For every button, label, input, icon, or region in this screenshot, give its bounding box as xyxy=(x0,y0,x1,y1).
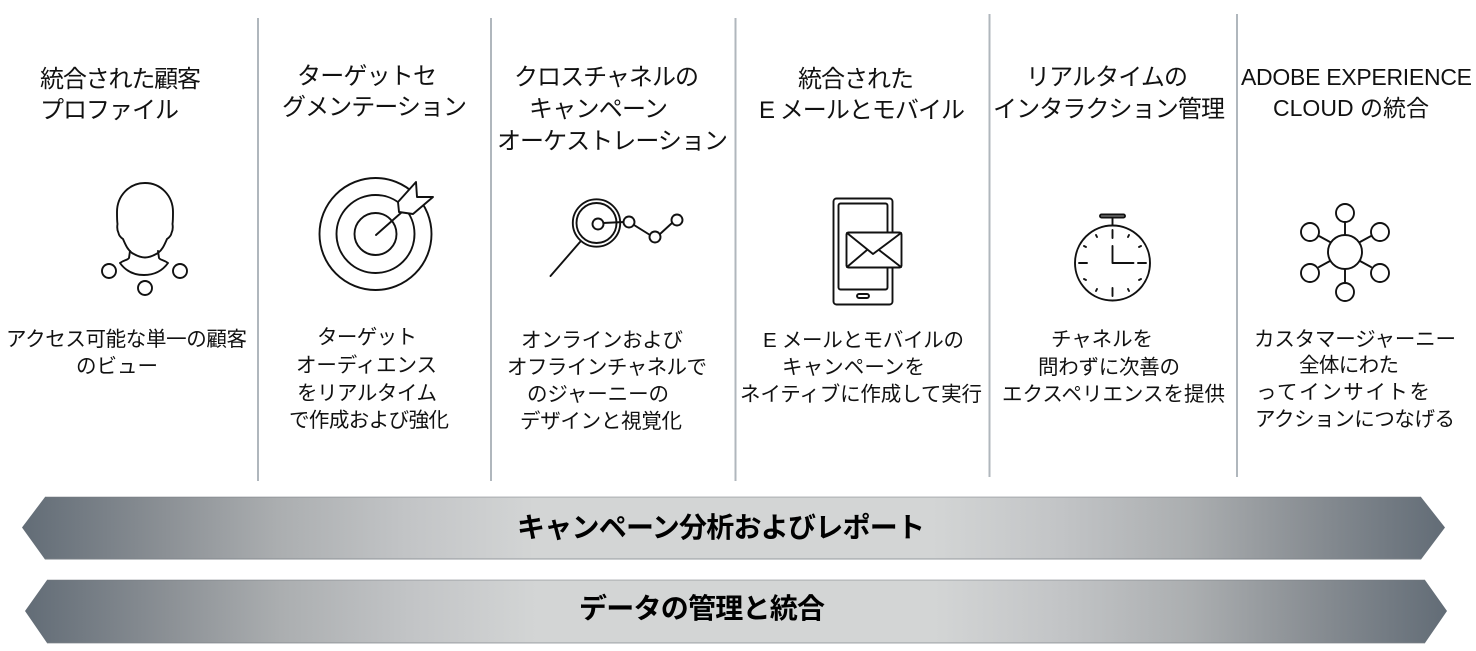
heading: real-time interaction management: リアルタイムの xyxy=(1026,64,1188,91)
heading: cross-channel campaign orchestration: オーケストレーション xyxy=(497,128,728,155)
panel: unified customer profile xyxy=(6,66,247,378)
heading: Adobe Experience Cloud integration xyxy=(1241,64,1472,121)
icon: phone with envelope xyxy=(834,198,902,304)
icon: hub network xyxy=(1301,204,1389,301)
banner: data management and integration xyxy=(25,580,1447,643)
heading: cross-channel campaign orchestration: クロスチャネルの xyxy=(514,64,699,91)
text: orchestration description: オンラインおよび xyxy=(521,329,683,352)
text: real-time description xyxy=(1002,328,1225,406)
heading: unified customer profile: 統合された顧客 xyxy=(40,66,201,93)
text: real-time description: 問わずに次善の xyxy=(1038,356,1180,379)
icon: magnifier with journey nodes xyxy=(550,199,682,276)
text: real-time description: エクスペリエンスを提供 xyxy=(1002,383,1225,406)
heading: target segmentation: グメンテーション xyxy=(282,94,467,121)
panel: target segmentation xyxy=(282,63,467,432)
text: integration description: ってインサイトを xyxy=(1256,381,1430,404)
text: target segmentation description xyxy=(289,326,449,432)
heading: target segmentation: ターゲットセ xyxy=(297,63,437,90)
text: orchestration description: デザインと視覚化 xyxy=(520,410,682,433)
heading: unified email and mobile xyxy=(759,66,965,124)
text: target segmentation description: をリアルタイム xyxy=(297,382,437,405)
text: email and mobile description: キャンペーンを xyxy=(782,356,925,379)
heading: unified customer profile xyxy=(40,66,201,124)
text: integration description xyxy=(1254,328,1456,431)
panel: cross-channel campaign orchestration xyxy=(497,64,728,433)
heading: cross-channel campaign orchestration xyxy=(497,64,728,155)
text: email and mobile description: E メールとモバイルの xyxy=(763,329,964,352)
panel: Adobe Experience Cloud integration xyxy=(1241,64,1472,431)
heading: real-time interaction management: インタラクション管理 xyxy=(993,96,1225,123)
panel: real-time interaction management xyxy=(993,64,1225,406)
icon: target with dart xyxy=(320,178,433,290)
icon: customer head with nodes xyxy=(102,183,187,295)
text: target segmentation description: で作成および強化 xyxy=(289,409,449,432)
heading: unified customer profile: プロファイル xyxy=(40,97,179,124)
text: integration description: アクションにつなげる xyxy=(1255,408,1455,431)
text: orchestration description: オフラインチャネルで xyxy=(507,356,707,379)
banner label: キャンペーン分析およびレポート xyxy=(517,512,925,543)
text: email and mobile description: ネイティブに作成して実行 xyxy=(740,382,982,406)
text: integration description: カスタマージャーニー xyxy=(1254,328,1456,351)
text: orchestration description: のジャーニーの xyxy=(527,383,669,406)
panel: unified email and mobile xyxy=(740,66,982,406)
text: orchestration description xyxy=(507,329,707,433)
heading: cross-channel campaign orchestration: キャンペーン xyxy=(529,96,668,123)
banner label: データの管理と統合 xyxy=(579,592,825,624)
heading: unified email and mobile: E メールとモバイル xyxy=(759,97,965,124)
text: unified customer description: のビュー xyxy=(76,355,158,378)
heading: target segmentation xyxy=(282,63,467,121)
text: integration description: 全体にわた xyxy=(1299,354,1399,377)
heading: Adobe Experience Cloud integration: CLOUD の統合 xyxy=(1273,95,1429,121)
text: email and mobile description xyxy=(740,329,982,406)
heading: real-time interaction management xyxy=(993,64,1225,123)
heading: Adobe Experience Cloud integration: ADOBE EXPERIENCE xyxy=(1241,64,1472,90)
text: unified customer description: アクセス可能な単一の顧客 xyxy=(6,328,247,351)
banner: campaign analytics and reporting xyxy=(22,497,1445,560)
text: real-time description: チャネルを xyxy=(1051,328,1153,351)
text: unified customer description xyxy=(6,328,247,378)
text: target segmentation description: オーディエンス xyxy=(296,354,437,377)
text: target segmentation description: ターゲット xyxy=(317,326,417,349)
heading: unified email and mobile: 統合された xyxy=(798,66,914,93)
icon: stopwatch xyxy=(1075,214,1150,300)
